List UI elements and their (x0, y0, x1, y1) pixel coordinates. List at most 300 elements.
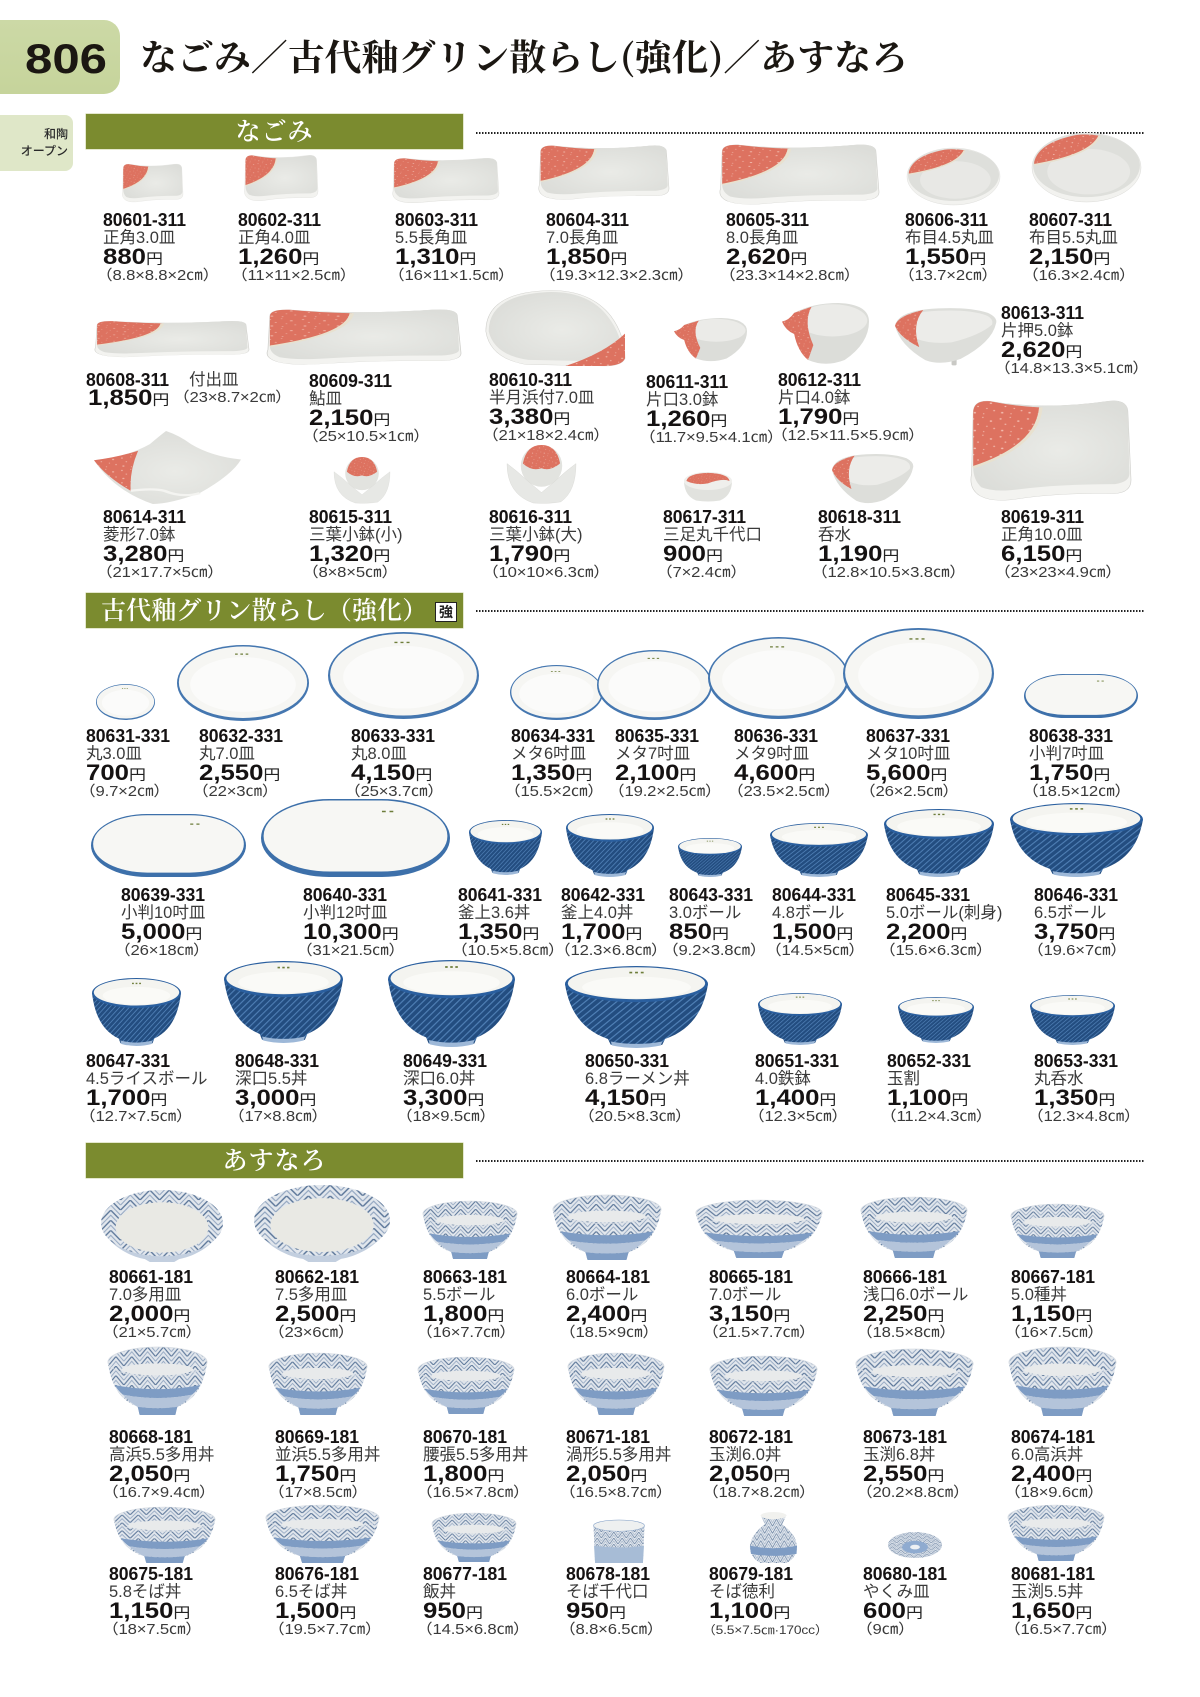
text 80638 (1029, 727, 1030, 800)
text: 1,190円 (818, 541, 899, 566)
text: 3,000円 (235, 1085, 316, 1110)
text: 80603-311 (395, 209, 478, 230)
text: 3,150円 (709, 1301, 790, 1326)
text: 7.5多用皿 (275, 1286, 347, 1304)
product 80666 (861, 1197, 967, 1258)
product 80617 (684, 472, 732, 502)
text: （10×10×6.3㎝） (482, 565, 610, 581)
text: 1,700円 (86, 1085, 167, 1110)
text: 7.0長角皿 (546, 229, 618, 247)
text: 片口4.0鉢 (778, 389, 850, 407)
text: （22×3㎝） (192, 784, 278, 800)
product 80664 (553, 1195, 661, 1260)
text: （25×3.7㎝） (344, 784, 444, 800)
text: 玉渕5.5丼 (1011, 1583, 1083, 1601)
heading: あすなろ: あすなろ (222, 1148, 326, 1175)
text: 2,050円 (566, 1461, 647, 1486)
text: 1,400円 (755, 1085, 836, 1110)
text: 深口6.0丼 (403, 1070, 475, 1088)
text: 80670-181 (423, 1426, 507, 1447)
text: 950円 (566, 1598, 626, 1623)
text: 1,310円 (395, 244, 476, 269)
text 80607 (1022, 209, 1136, 284)
text: 6.0高浜丼 (1011, 1446, 1083, 1464)
text 80649 (403, 1052, 404, 1125)
text: 80665-181 (709, 1266, 793, 1287)
text: 10,300円 (303, 919, 399, 944)
text: 1,850円 (88, 385, 169, 410)
text: 80653-331 (1034, 1050, 1118, 1071)
text: 5,600円 (866, 760, 947, 785)
product 80607 (1032, 132, 1142, 202)
text: 1,790円 (489, 541, 570, 566)
text: 玉渕6.8丼 (863, 1446, 935, 1464)
text: 呑水 (818, 526, 851, 544)
text 80643 (669, 886, 670, 959)
text: （16.5×7.8㎝） (416, 1485, 530, 1501)
text: （16.3×2.4㎝） (1022, 268, 1136, 284)
text 80640 (303, 886, 304, 959)
text: 片口3.0鉢 (646, 391, 718, 409)
text 80615 (302, 506, 402, 581)
text: 5,000円 (121, 919, 202, 944)
product 80669 (269, 1353, 367, 1415)
product 80648 (224, 961, 343, 1043)
text: 正角4.0皿 (238, 229, 310, 247)
heading: なごみ: なごみ (235, 119, 314, 146)
text 80633 (351, 727, 352, 800)
text: 1,750円 (275, 1461, 356, 1486)
product 80643 (678, 838, 742, 877)
text 80667 (1011, 1268, 1012, 1341)
text: 半月浜付7.0皿 (489, 389, 594, 407)
text 80664 (566, 1268, 567, 1341)
text: 1,150円 (1011, 1301, 1092, 1326)
text: 5.0種丼 (1011, 1286, 1067, 1304)
text: （12.3×5㎝） (748, 1109, 848, 1125)
text: （21.5×7.7㎝） (702, 1325, 816, 1341)
text 80650 (585, 1052, 586, 1125)
text: （19.6×7㎝） (1027, 943, 1127, 959)
product 80638 (1024, 674, 1138, 718)
heading: あすなろ (86, 1143, 463, 1178)
text 80618 (811, 506, 966, 581)
text: 80674-181 (1011, 1426, 1095, 1447)
text: 80614-311 (103, 506, 186, 527)
product 80649 (388, 960, 515, 1047)
text: （23×6㎝） (268, 1325, 354, 1341)
text: （21×18×2.4㎝） (482, 428, 610, 444)
text: 80651-331 (755, 1050, 839, 1071)
text 80669 (275, 1428, 276, 1501)
text 80632 (199, 727, 200, 800)
page number tab (0, 20, 120, 94)
text: （15.5×2㎝） (504, 784, 604, 800)
text: 4,600円 (734, 760, 815, 785)
text: 4,150円 (351, 760, 432, 785)
page number tab: 806 (25, 35, 107, 82)
text: 2,100円 (615, 760, 696, 785)
product 80637 (843, 628, 994, 719)
text: 80640-331 (303, 884, 387, 905)
text: 80646-331 (1034, 884, 1118, 905)
text 80601 (96, 209, 219, 284)
text: 80678-181 (566, 1563, 650, 1584)
product 80652 (898, 997, 974, 1043)
text 80675 (109, 1565, 110, 1638)
side tab: 和陶 (44, 127, 68, 141)
heading: なごみ (86, 114, 463, 149)
text: 80672-181 (709, 1426, 793, 1447)
text: 飯丼 (423, 1583, 456, 1601)
text: （19.2×2.5㎝） (608, 784, 722, 800)
text: （21×17.7×5㎝） (96, 565, 224, 581)
text: （12.8×10.5×3.8㎝） (811, 565, 966, 581)
text: （16×7.7㎝） (416, 1325, 516, 1341)
text: （20.5×8.3㎝） (578, 1109, 692, 1125)
text: （14.5×6.8㎝） (416, 1622, 530, 1638)
text: 80680-181 (863, 1563, 947, 1584)
text: （17×8.5㎝） (268, 1485, 368, 1501)
product 80678 (593, 1520, 645, 1563)
text: 玉割 (887, 1070, 920, 1088)
text: 1,750円 (1029, 760, 1110, 785)
text: 2,620円 (1001, 337, 1082, 362)
text 80611 (639, 371, 784, 446)
product 80635 (597, 650, 712, 720)
text 80662 (275, 1268, 276, 1341)
text: （16.5×8.7㎝） (559, 1485, 673, 1501)
text 80604 (539, 209, 694, 284)
text: 80643-331 (669, 884, 753, 905)
text: 布目4.5丸皿 (905, 229, 994, 247)
text: 3,280円 (103, 541, 184, 566)
text: 80608-311 (86, 369, 169, 390)
text: 80613-311 (1001, 302, 1084, 323)
product 80675 (114, 1507, 215, 1563)
text: 80605-311 (726, 209, 809, 230)
text 80609 (302, 370, 430, 445)
text: 80619-311 (1001, 506, 1084, 527)
text: 2,050円 (709, 1461, 790, 1486)
text: 80676-181 (275, 1563, 359, 1584)
text: （12.5×11.5×5.9㎝） (771, 428, 925, 444)
text 80677 (423, 1565, 424, 1638)
text: やくみ皿 (863, 1583, 930, 1601)
product 80653 (1030, 995, 1115, 1045)
title: なごみ／古代釉グリン散らし(強化)／あすなろ (140, 30, 908, 81)
text 80670 (423, 1428, 424, 1501)
product 80633 (328, 632, 479, 719)
text: （5.5×7.5㎝·170cc） (702, 1623, 828, 1637)
text 80653 (1034, 1052, 1035, 1125)
text: （16.5×7.7㎝） (1004, 1622, 1118, 1638)
text 80673 (863, 1428, 864, 1501)
text: 80604-311 (546, 209, 629, 230)
text 80668 (109, 1428, 110, 1501)
text: 1,500円 (772, 919, 853, 944)
text: （10.5×5.8㎝） (451, 943, 565, 959)
product 80640 (261, 799, 450, 877)
text: 3.0ボール (669, 904, 741, 922)
product 80647 (92, 978, 181, 1046)
text: 1,100円 (887, 1085, 968, 1110)
product 80612 (782, 303, 869, 364)
text: 三足丸千代口 (663, 526, 762, 544)
text: （18.5×9㎝） (559, 1325, 659, 1341)
text: 80606-311 (905, 209, 988, 230)
text: 80632-331 (199, 725, 283, 746)
text: 80610-311 (489, 369, 572, 390)
text: 600円 (863, 1598, 923, 1623)
product 80674 (1009, 1347, 1116, 1416)
text: （21×5.7㎝） (102, 1325, 202, 1341)
product 80616 (506, 445, 576, 504)
text: メタ10吋皿 (866, 745, 950, 763)
text: 5.8そば丼 (109, 1583, 181, 1601)
text: 80648-331 (235, 1050, 319, 1071)
text: （8.8×8.8×2㎝） (96, 268, 219, 284)
text: 3,380円 (489, 404, 570, 429)
text: 80631-331 (86, 725, 170, 746)
text: 4.0鉄鉢 (755, 1070, 811, 1088)
text: 菱形7.0鉢 (103, 526, 175, 544)
text: 三葉小鉢(小) (309, 526, 402, 544)
product 80663 (423, 1201, 517, 1259)
text 80610 (482, 369, 610, 444)
text: （19.3×12.3×2.3㎝） (539, 268, 694, 284)
product 80665 (696, 1200, 822, 1258)
product 80670 (418, 1357, 514, 1414)
text: 80677-181 (423, 1563, 507, 1584)
text: 80601-311 (103, 209, 186, 230)
text: 80650-331 (585, 1050, 669, 1071)
text: 80636-331 (734, 725, 818, 746)
product 80668 (108, 1347, 207, 1415)
heading: 古代釉グリン散らし: 強 (439, 602, 453, 622)
text: （15.6×6.3㎝） (879, 943, 993, 959)
text 80619 (994, 506, 1122, 581)
text: 80663-181 (423, 1266, 507, 1287)
text 80602 (231, 209, 356, 284)
text: （18×7.5㎝） (102, 1622, 202, 1638)
text: 丸3.0皿 (86, 745, 142, 763)
text: 小判12吋皿 (303, 904, 387, 922)
text: 80602-311 (238, 209, 321, 230)
text: 1,790円 (778, 404, 859, 429)
text: 80641-331 (458, 884, 542, 905)
text: 2,250円 (863, 1301, 944, 1326)
text: 渦形5.5多用丼 (566, 1446, 671, 1464)
product 80644 (770, 823, 868, 877)
text: （18.5×8㎝） (856, 1325, 956, 1341)
text: 2,150円 (309, 405, 390, 430)
heading: 古代釉グリン散らし: 古代釉グリン散らし（強化） (101, 598, 427, 625)
text: 80642-331 (561, 884, 645, 905)
product 80650 (565, 966, 708, 1048)
text: 4.8ボール (772, 904, 844, 922)
text: 850円 (669, 919, 729, 944)
text: 80661-181 (109, 1266, 193, 1287)
text: 2,500円 (275, 1301, 356, 1326)
text: 1,350円 (458, 919, 539, 944)
text: 1,100円 (709, 1598, 790, 1623)
text: 80634-331 (511, 725, 595, 746)
text 80636 (734, 727, 735, 800)
text: 片押5.0鉢 (1001, 322, 1073, 340)
product 80632 (177, 645, 309, 721)
text: 布目5.5丸皿 (1029, 229, 1118, 247)
text 80663 (423, 1268, 424, 1341)
text: 80615-311 (309, 506, 392, 527)
text 80645 (886, 886, 887, 959)
product 80631 (96, 684, 155, 720)
text 80652 (887, 1052, 888, 1125)
text: 5.0ボール(刺身) (886, 904, 1002, 922)
text: （8.8×6.5㎝） (559, 1622, 663, 1638)
text 80631 (86, 727, 87, 800)
text: （23.3×14×2.8㎝） (719, 268, 860, 284)
text: 6.8ラーメン丼 (585, 1070, 690, 1088)
text: そば千代口 (566, 1583, 648, 1601)
text: 2,550円 (199, 760, 280, 785)
text: 80652-331 (887, 1050, 971, 1071)
text: 丸7.0皿 (199, 745, 255, 763)
text: （8×8×5㎝） (302, 565, 398, 581)
text: 80649-331 (403, 1050, 487, 1071)
text 80612 (771, 369, 925, 444)
text: 2,400円 (566, 1301, 647, 1326)
text: 正角3.0皿 (103, 229, 175, 247)
text: 玉渕6.0丼 (709, 1446, 781, 1464)
text: 880円 (103, 244, 163, 269)
text: 4.5ライスボール (86, 1070, 207, 1088)
text: 1,700円 (561, 919, 642, 944)
text: 丸呑水 (1034, 1070, 1084, 1088)
text: （9.2×3.8㎝） (662, 943, 766, 959)
text: 80639-331 (121, 884, 205, 905)
text: 5.5長角皿 (395, 229, 467, 247)
text: 700円 (86, 760, 146, 785)
text: 80637-331 (866, 725, 950, 746)
text: （16×11×1.5㎝） (388, 268, 514, 284)
side tab: オープン (21, 144, 68, 158)
text: 80638-331 (1029, 725, 1113, 746)
product 80680 (888, 1532, 942, 1558)
text: 丸8.0皿 (351, 745, 407, 763)
text 80634 (511, 727, 512, 800)
product 80613 (895, 308, 996, 366)
text 80641 (458, 886, 459, 959)
text: メタ7吋皿 (615, 745, 690, 763)
text: 2,150円 (1029, 244, 1110, 269)
text: （7×2.4㎝） (656, 565, 747, 581)
text: 鮎皿 (309, 390, 342, 408)
text: （25×10.5×1㎝） (302, 429, 430, 445)
text: （11.7×9.5×4.1㎝） (639, 430, 784, 446)
text 80603 (388, 209, 514, 284)
text: 正角10.0皿 (1001, 526, 1083, 544)
product 80661 (101, 1190, 223, 1262)
text: 900円 (663, 541, 723, 566)
text: 三葉小鉢(大) (489, 526, 582, 544)
product 80673 (856, 1349, 973, 1416)
text: （12.3×4.8㎝） (1027, 1109, 1141, 1125)
text: 1,550円 (905, 244, 986, 269)
text 80646 (1034, 886, 1035, 959)
text: 80671-181 (566, 1426, 650, 1447)
text: （11×11×2.5㎝） (231, 268, 356, 284)
text: 1,350円 (511, 760, 592, 785)
product 80645 (884, 809, 994, 877)
product 80679 (749, 1512, 798, 1563)
product 80667 (1011, 1204, 1104, 1258)
text: （11.2×4.3㎝） (880, 1109, 992, 1125)
text: 付出皿 (189, 371, 238, 389)
text: 80666-181 (863, 1266, 947, 1287)
text: 小判7吋皿 (1029, 745, 1104, 763)
text: 3,750円 (1034, 919, 1115, 944)
product 80662 (254, 1185, 390, 1262)
text: 4,150円 (585, 1085, 666, 1110)
product 80681 (1008, 1505, 1104, 1561)
text 80678 (566, 1565, 567, 1638)
text: （20.2×8.8㎝） (856, 1485, 970, 1501)
product 80641 (469, 820, 542, 875)
text: （14.8×13.3×5.1㎝） (994, 361, 1149, 377)
product 80608 (94, 321, 250, 358)
text 80672 (709, 1428, 710, 1501)
text: 1,650円 (1011, 1598, 1092, 1623)
text: 80667-181 (1011, 1266, 1095, 1287)
text 80651 (755, 1052, 756, 1125)
text: メタ9吋皿 (734, 745, 809, 763)
text 80605 (719, 209, 860, 284)
product 80602 (244, 155, 318, 201)
text: （9㎝） (856, 1622, 915, 1638)
text: 80673-181 (863, 1426, 947, 1447)
text: （12.3×6.8㎝） (554, 943, 668, 959)
text 80617 (656, 506, 762, 581)
product 80639 (91, 814, 246, 877)
product 80603 (392, 158, 500, 203)
product 80615 (334, 457, 390, 504)
text: （23.5×2.5㎝） (727, 784, 841, 800)
text: 2,620円 (726, 244, 807, 269)
text 80616 (482, 506, 610, 581)
text: 80609-311 (309, 370, 392, 391)
text 80642 (561, 886, 562, 959)
text 80671 (566, 1428, 567, 1501)
text: 5.5ボール (423, 1286, 495, 1304)
text: （16×7.5㎝） (1004, 1325, 1104, 1341)
text 80648 (235, 1052, 236, 1125)
text: 6.5ボール (1034, 904, 1106, 922)
text: 80675-181 (109, 1563, 193, 1584)
text 80614 (96, 506, 224, 581)
text: 80611-311 (646, 371, 728, 392)
text: 80644-331 (772, 884, 856, 905)
text: （26×18㎝） (114, 943, 209, 959)
text: 2,050円 (109, 1461, 190, 1486)
text: 1,320円 (309, 541, 390, 566)
text: 80645-331 (886, 884, 970, 905)
product 80672 (710, 1356, 817, 1416)
text: 高浜5.5多用丼 (109, 1446, 214, 1464)
text: 80612-311 (778, 369, 861, 390)
text: 1,150円 (109, 1598, 190, 1623)
text 80644 (772, 886, 773, 959)
